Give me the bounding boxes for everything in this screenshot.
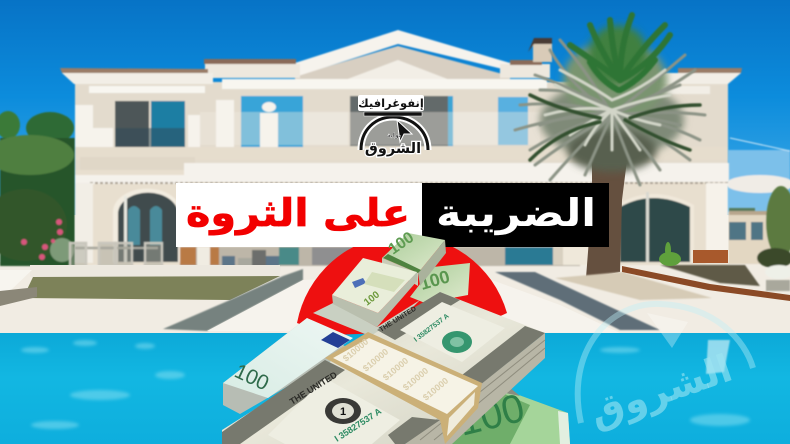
- villa: ground floor room: [180, 247, 589, 271]
- villa: upper storey wall: [75, 82, 728, 182]
- badge: cursor: [397, 120, 412, 142]
- villa: awning centre: [222, 79, 547, 89]
- villa: lower awning: [184, 163, 729, 182]
- stack: euro green bottom right: [447, 378, 570, 444]
- stack: dollars side lines: [420, 340, 545, 440]
- watermark arc: [578, 304, 753, 423]
- stack: dollars engraving: [222, 292, 545, 444]
- watermark reflection: [706, 340, 730, 374]
- dollars: front seal: [325, 398, 361, 424]
- villa: arched window left: [113, 189, 181, 262]
- left lounge chair: [0, 270, 37, 306]
- watermark cursor: [647, 313, 688, 348]
- money band: $10000: [381, 356, 410, 383]
- villa: upper window 3: [350, 96, 453, 146]
- stack: euro 100 second: 100: [362, 289, 382, 308]
- swimming pool: [0, 333, 790, 444]
- dollars: back serial: I 35827537 A: [413, 313, 451, 344]
- villa: upper window 2: [241, 96, 303, 147]
- terrace ground: [0, 262, 790, 336]
- stack: dollars side: [405, 333, 545, 444]
- palm green core: [570, 15, 670, 90]
- villa: arched window right: [617, 192, 694, 262]
- central white terrace: [207, 272, 620, 333]
- villa: upper window left: [115, 101, 185, 157]
- title: black panel: [422, 183, 609, 247]
- title: white text: الضريبة: [436, 191, 596, 235]
- palm dark lower fronds: [530, 95, 700, 160]
- stack: euro 100 blue-white: [223, 318, 353, 414]
- stack: euro 100 top: [382, 229, 446, 286]
- water channel right: [495, 272, 660, 330]
- villa: [60, 30, 742, 271]
- villa: balcony posts: [75, 100, 278, 158]
- garden bushes left: [0, 111, 75, 266]
- watermark logo: [578, 304, 753, 436]
- terracotta planter: [693, 250, 728, 263]
- villa: scalloped edge: [90, 182, 728, 184]
- dollars: back title: THE UNITED: [378, 306, 418, 334]
- palm trunk: [586, 120, 632, 278]
- palm tree: [515, 15, 705, 278]
- villa: fascia band: [205, 64, 300, 78]
- villa: eave left: [62, 73, 213, 84]
- villa: pillar right: [706, 183, 728, 263]
- wooden planter edge: [622, 266, 790, 301]
- sky background: [0, 0, 790, 215]
- stack: euro green behind right: 100: [418, 266, 452, 294]
- garden plant by door: [659, 242, 681, 266]
- title: red text: على الثروة: [186, 191, 410, 236]
- money band: $10000: [401, 366, 430, 393]
- red circle behind money: [297, 235, 507, 335]
- stack: dollars top face: [222, 292, 545, 444]
- title: white panel: [176, 183, 423, 247]
- pool ripples: [21, 340, 750, 429]
- villa: pediment fascia: [295, 30, 515, 77]
- money band: $10000: [421, 376, 450, 403]
- palm grey fronds: [515, 40, 705, 185]
- badge: label: [358, 95, 424, 111]
- villa: chimney: [528, 38, 552, 62]
- palm pale blades: [545, 70, 670, 150]
- villa: upper window 4: [498, 97, 528, 145]
- stack: euro 100 top: 100: [386, 229, 417, 258]
- infographic badge: [358, 95, 428, 157]
- money band: [325, 332, 482, 444]
- badge: small word: بوابة: [387, 132, 401, 139]
- stack: euro under layer: [313, 300, 420, 340]
- stack: dollars light panels: [268, 302, 505, 444]
- stack: euro 100 second: [332, 258, 417, 327]
- watermark name: الشروق: [584, 346, 738, 436]
- badge: logo name: الشروق: [365, 141, 421, 157]
- stack: euro green behind right: [410, 263, 470, 303]
- villa: pillar left: [75, 183, 93, 263]
- villa: balcony railing: [200, 112, 540, 145]
- villa: ground storey wall: [75, 170, 728, 265]
- dollars: front serial: I 35827537 A: [333, 406, 384, 444]
- distant horizon and clouds: [726, 138, 790, 215]
- villa: eave right: [660, 73, 741, 84]
- villa: roof tiles right: [678, 68, 742, 73]
- walkway: [30, 265, 280, 277]
- dollars: back seal: [442, 331, 472, 353]
- money stacks: [222, 229, 570, 444]
- patio furniture: [70, 243, 162, 267]
- villa: roof tiles left: [60, 68, 208, 73]
- villa: awning right: [660, 86, 710, 94]
- villa: pediment shadow: [295, 46, 510, 84]
- title banner: [176, 183, 609, 247]
- badge: pen tool arc: [361, 117, 428, 150]
- palm crown mass: [540, 25, 684, 172]
- villa: pediment tympanum: [345, 60, 450, 80]
- dollars: front seal: 1: [340, 406, 346, 418]
- badge: horizontal bar: [364, 112, 422, 116]
- infographic badge: إنفوغرافيك: [358, 96, 424, 111]
- villa: roof tiles middle: [204, 59, 296, 64]
- villa: awning left: [89, 86, 205, 93]
- money band: $10000: [361, 347, 390, 374]
- villa: balcony floor: [75, 147, 728, 160]
- pond: [660, 265, 760, 286]
- dollars: front title: THE UNITED: [288, 369, 339, 407]
- water channel left: [163, 269, 303, 331]
- stack: euro 100 blue-white: 100: [231, 360, 272, 395]
- garden wall and tree right: [728, 186, 790, 291]
- stack: euro green bottom right: 100: [454, 386, 529, 444]
- money band: $10000: [341, 337, 370, 364]
- lawn: [23, 276, 280, 300]
- gravel bed: [555, 272, 712, 300]
